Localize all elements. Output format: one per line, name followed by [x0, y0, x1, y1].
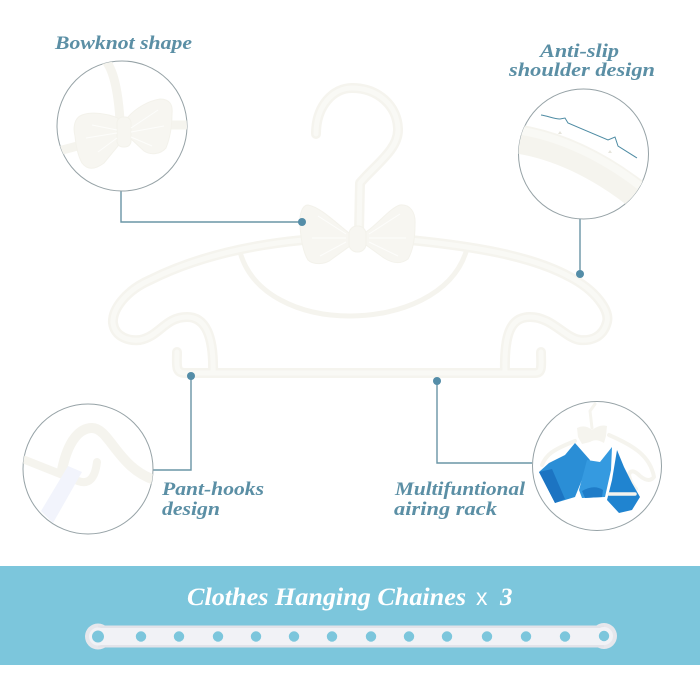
hook [316, 88, 398, 232]
lower arc [240, 252, 466, 316]
callout: pant-hooks design [20, 372, 264, 534]
heading: pant-hooks design: design [162, 499, 220, 520]
banner heading: Clothes Hanging Chaines [187, 584, 466, 611]
small hanger [542, 404, 654, 489]
banner background [0, 566, 700, 665]
detail circle: bow close-up [55, 56, 190, 191]
heading: multifuntional airing rack [394, 479, 526, 520]
leader dot [576, 270, 584, 278]
detail circle: shoulder close-up [510, 89, 648, 219]
leader dot [298, 218, 306, 226]
leader line [579, 219, 581, 274]
leader line [437, 381, 532, 463]
heading: anti-slip shoulder design: Anti-slip [539, 41, 619, 62]
heading: anti-slip shoulder design: shoulder design [508, 60, 655, 81]
hanging chain [85, 623, 617, 650]
heading: multifuntional airing rack: Multifuntional [394, 479, 526, 500]
hanger illustration [113, 88, 607, 373]
leader dot [433, 377, 441, 385]
shoulders and bar [113, 240, 607, 373]
callout: multifunctional airing rack [394, 377, 662, 530]
banner: clothes hanging chains [0, 566, 700, 665]
callout: bowknot shape [54, 33, 306, 226]
leader line [153, 376, 191, 470]
heading: anti-slip shoulder design [508, 41, 655, 81]
heading: bowknot shape: Bowknot shape [54, 33, 193, 54]
bow [300, 205, 415, 264]
heading: pant-hooks design: Pant-hooks [161, 479, 264, 500]
blue towels [539, 443, 640, 513]
detail circle: pant hook close-up [20, 404, 158, 534]
heading: pant-hooks design [161, 479, 264, 520]
banner heading: 3 [499, 584, 512, 611]
detail circle: towels on hanger [532, 402, 662, 530]
heading: multifuntional airing rack: airing rack [394, 499, 498, 520]
leader line [121, 191, 302, 222]
callout: anti-slip shoulder design [508, 41, 655, 278]
banner heading: x [476, 584, 488, 610]
leader dot [187, 372, 195, 380]
